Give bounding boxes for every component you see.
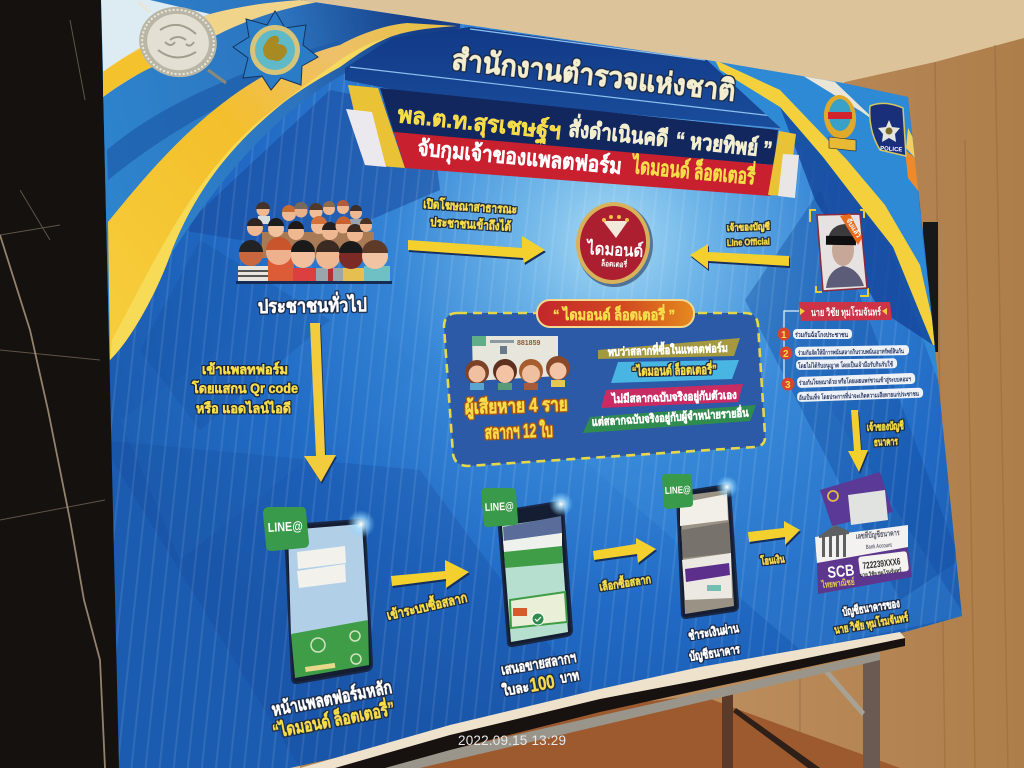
- label: line official owner: Line Official: [727, 237, 770, 249]
- table legs: [722, 690, 733, 768]
- bank account illustration: Bank Account: [866, 543, 892, 551]
- connector line: [784, 311, 799, 384]
- badge: line at phone 3: LINE@: [665, 485, 691, 497]
- badge: line at phone 2: LINE@: [485, 500, 514, 514]
- upper left dark band: [107, 47, 321, 180]
- label: lottery offer: บาท: [559, 667, 580, 686]
- bank account purple panel: [817, 547, 912, 594]
- bank account illustration: ไทยพาณิชย์: [820, 576, 855, 590]
- ribbon: no real ticket: ไม่มีสลากฉบับจริงอยู่กับตัวเอง: [610, 388, 737, 407]
- phone 2 glint: [549, 492, 573, 516]
- arrow: purchase to pay: [593, 538, 656, 563]
- label: main platform page: [270, 676, 396, 742]
- arrow: owner to platform: [690, 244, 789, 269]
- banner: left gold tab: [348, 85, 405, 168]
- ribbon: platform name: [611, 360, 739, 383]
- main title: สำนักงานตำรวจแห่งชาติ: [450, 44, 737, 108]
- label: line official owner: เจ้าของบัญชี: [727, 220, 771, 234]
- panel title pill: [537, 300, 694, 327]
- panel title pill: “ ไดมอนด์ ล็อตเตอรี่ ”: [553, 304, 675, 324]
- logo: royal police crest: [133, 0, 226, 84]
- phone 2 body: [498, 502, 572, 646]
- allegation 3: อันเป็นเท็จ โดยประการที่น่าจะเกิดความเสียหายแก่ประชาชน: [799, 388, 919, 402]
- label: pay by bank account: บัญชีธนาคาร: [688, 642, 741, 664]
- badge: line at phone 1: LINE@: [267, 518, 303, 535]
- ribbon: real ticket with sellers: [583, 403, 756, 433]
- crowd of people illustration: [236, 200, 392, 284]
- logo: police shield: POLICE: [880, 146, 903, 154]
- ribbon: no real ticket: [601, 384, 743, 408]
- phone 1 green menu: [291, 620, 369, 678]
- crowd middle row: [247, 216, 374, 258]
- crowd front faces: [239, 237, 388, 269]
- badge: line at phone 2: [481, 488, 518, 527]
- ticket count: สลากฯ 12 ใบ: [484, 419, 553, 444]
- allegation 3: ร่วมกันโฆษณาด้วย หรือโดยเผยแพร่ชวนเข้าสู่ระบบคอมฯ: [799, 374, 911, 388]
- crowd back row: [256, 200, 363, 227]
- diagonal bands: [100, 90, 965, 768]
- id card: [848, 490, 888, 525]
- label: enter platform: หรือ แอดไลน์ไอดี: [196, 400, 291, 416]
- suspect photo: [817, 214, 867, 291]
- background: wood panel lines: [800, 45, 1008, 768]
- lottery ticket: [472, 336, 558, 381]
- label: pay by bank account: ชำระเงินผ่าน: [687, 621, 740, 643]
- label: public advertising: เปิดโฆษณาสาธารณะ: [423, 196, 518, 217]
- upper right cream band: [804, 76, 870, 118]
- banner: text diamond lottery: ไดมอนด์ ล็อตเตอรี่: [630, 149, 757, 189]
- label: line official owner: [727, 220, 771, 249]
- phone 1: main platform: [285, 510, 375, 683]
- banner: text police general: พล.ต.ท.สุรเชษฐ์ฯ: [396, 101, 562, 146]
- suspect name plate: [799, 302, 892, 321]
- upper right orange band: [906, 151, 918, 192]
- label: enter platform: โดยแสกน Qr code: [191, 379, 298, 396]
- scb logo mark: [828, 491, 838, 501]
- logo: diamond lottery seal: [572, 198, 657, 291]
- phone 1 screen: [288, 524, 368, 636]
- bank account white panel: [815, 525, 908, 564]
- background: black marble wall: [0, 0, 125, 768]
- logo: police star badge: [233, 11, 318, 90]
- label: bank account owner: เจ้าของบัญชี: [866, 419, 904, 434]
- banner: text arrest owner: จับกุมเจ้าของแพลตฟอร์ม: [416, 135, 623, 181]
- label: bank account owner name: นาย วิชัย ทุมโรมจันทร์: [833, 609, 910, 638]
- background: floor: [300, 695, 900, 768]
- account number pill: [858, 551, 909, 579]
- gold swoosh inner highlight: [110, 37, 390, 360]
- label: lottery offer: เสนอขายสลากฯ: [500, 649, 577, 678]
- label: general public: ประชาชนทั่วไป: [258, 291, 367, 318]
- ribbon: purchased tickets: พบว่าสลากที่ซื้อในแพลตฟอร์ม: [608, 339, 728, 359]
- phone 3 form: [681, 522, 731, 558]
- photo timestamp: 2022.09.15 13:29: [458, 733, 566, 748]
- phone 1 chat bubbles: [297, 546, 346, 569]
- victim count: ผู้เสียหาย 4 ราย: [464, 393, 568, 420]
- label: bank account owner: ธนาคาร: [874, 436, 898, 449]
- suspect profile: [778, 210, 923, 402]
- account number pill: 722239XXX6: [862, 556, 901, 572]
- title band highlight: [350, 29, 790, 118]
- bank account label: เลขที่บัญชีธนาคาร: [855, 526, 901, 542]
- allegation 1: [778, 328, 852, 341]
- arrow: pay to bank: [748, 521, 800, 545]
- label: lottery offer: ใบละ: [501, 678, 530, 699]
- phone 1 menu icons: [311, 631, 361, 664]
- upper right corner: [707, 60, 945, 400]
- upper left glow: [101, 0, 210, 72]
- phone 3 screen: [680, 490, 734, 614]
- allegation 2: ร่วมกันจัดให้มีการพนันสลากกินรวบพนันเอาทรัพย์สินกัน: [798, 346, 904, 357]
- phone 2 screen: [502, 517, 568, 642]
- upper left corner: [100, 0, 460, 360]
- panel outline: [444, 313, 765, 466]
- arrow: platform to purchase: [391, 560, 469, 588]
- banner: navy row: [380, 88, 778, 165]
- allegation 1: 1: [781, 330, 787, 341]
- crowd shadow base: [236, 281, 392, 284]
- label: public advertising: ประชาชนเข้าถึงได้: [430, 214, 512, 234]
- banner: left white tab: [346, 109, 386, 167]
- allegation 2: โดยไม่ได้รับอนุญาต โดยเป็นเจ้ามือรับกินรับใช้: [797, 359, 893, 370]
- allegation 1: ร่วมกันฉ้อโกงประชาชน: [795, 330, 848, 339]
- logo: diamond lottery seal: ล็อตเตอรี่: [601, 257, 628, 269]
- lottery ticket: 881859: [517, 340, 540, 347]
- ribbon: purchased tickets: [598, 338, 740, 359]
- phone 2 header: [503, 516, 562, 541]
- scb name: SCB: [827, 562, 855, 582]
- upper right yellow band: [906, 128, 915, 158]
- crowd front bodies: [238, 256, 390, 282]
- victim faces: [465, 356, 570, 390]
- upper left cream band: [103, 0, 318, 97]
- background: wood wall: [300, 38, 1024, 768]
- label: pay by bank account: [687, 621, 741, 664]
- banner: text fake lottery: “ หวยทิพย์ ”: [674, 127, 774, 162]
- badge: line at phone 3: [662, 474, 693, 509]
- label: public advertising: [423, 196, 518, 234]
- label: enter platform: เข้าแพลทฟอร์ม: [202, 361, 288, 377]
- phone 2 ticket: [510, 592, 567, 628]
- suspect name plate: นาย วิชัย ทุมโรมจันทร์: [811, 305, 881, 320]
- main gold swoosh left: [108, 23, 457, 360]
- phone 3 glint: [716, 476, 738, 498]
- banner: red row: [394, 132, 774, 196]
- label: select lottery: เลือกซื้อสลาก: [598, 570, 652, 594]
- label: enter lottery system: เข้าระบบซื้อสลาก: [385, 587, 469, 623]
- bank building icon: [819, 525, 849, 557]
- phone 1 glint: [347, 510, 375, 538]
- table black edge: [325, 638, 905, 768]
- suspect photo: จับแล้ว: [844, 216, 863, 239]
- logo: second police seal: [822, 93, 858, 151]
- banner: right gold tab: [768, 131, 796, 196]
- label: bank account owner: [866, 419, 904, 449]
- label: bank account owner name: [833, 597, 910, 638]
- panel: diamond lottery victims: [444, 300, 765, 466]
- label: lottery offer: [500, 649, 580, 699]
- label: transfer money: โอนเงิน: [759, 552, 786, 568]
- label: main platform page: หน้าแพลตฟอร์มหลัก: [270, 676, 394, 720]
- label: bank account owner name: บัญชีธนาคารของ: [841, 597, 901, 619]
- label: main platform page: “ไดมอนด์ ล็อตเตอรี่”: [270, 696, 396, 742]
- purple bank book: [820, 472, 893, 526]
- allegation 3: [782, 373, 923, 402]
- banner: text ordered prosecution: สั่งดำเนินคดี: [567, 112, 670, 151]
- table stand: [300, 632, 905, 768]
- photo corner marks: [810, 210, 868, 296]
- background: dark door gap: [923, 222, 938, 352]
- arrow: public to line: [304, 323, 336, 482]
- bank account illustration: [815, 472, 912, 594]
- allegation 3: 3: [785, 380, 791, 391]
- table grey rail: [370, 652, 880, 768]
- logo: diamond lottery seal: ไดมอนด์: [585, 238, 644, 261]
- phone 3 payment card: [682, 553, 732, 600]
- phone 2 check mark: [532, 613, 544, 625]
- headline banner: [346, 85, 799, 198]
- arrow: suspect to bank: [848, 410, 868, 472]
- right gold swoosh: [715, 60, 938, 345]
- ribbon: real ticket with sellers: แต่สลากฉบับจริงอยู่กับผู้จำหน่ายรายอื่น: [591, 403, 749, 430]
- upper left gold tip: [103, 48, 152, 97]
- logo: police shield: [870, 103, 906, 156]
- phone 1 body: [285, 520, 372, 683]
- label: lottery offer: 100: [528, 672, 556, 697]
- allegation 2: 2: [783, 349, 789, 360]
- arrow: public to platform: [408, 236, 545, 263]
- navy title band: [345, 27, 800, 130]
- phone 3: payment: [677, 476, 738, 618]
- label: enter platform: [191, 361, 298, 416]
- account number pill: นาย วิชัย ทุมโรมจันทร์: [859, 566, 902, 579]
- table cream top: [300, 632, 905, 768]
- badge: line at phone 1: [263, 507, 309, 551]
- allegation 2: [780, 345, 909, 370]
- phone 3 body: [677, 485, 738, 618]
- ribbon: platform name: “ไดมอนด์ ล็อตเตอรี่”: [632, 360, 717, 379]
- banner: right white tab: [778, 154, 799, 198]
- phone 2: lottery offer: [498, 492, 573, 646]
- dark band inside right arc: [780, 107, 933, 345]
